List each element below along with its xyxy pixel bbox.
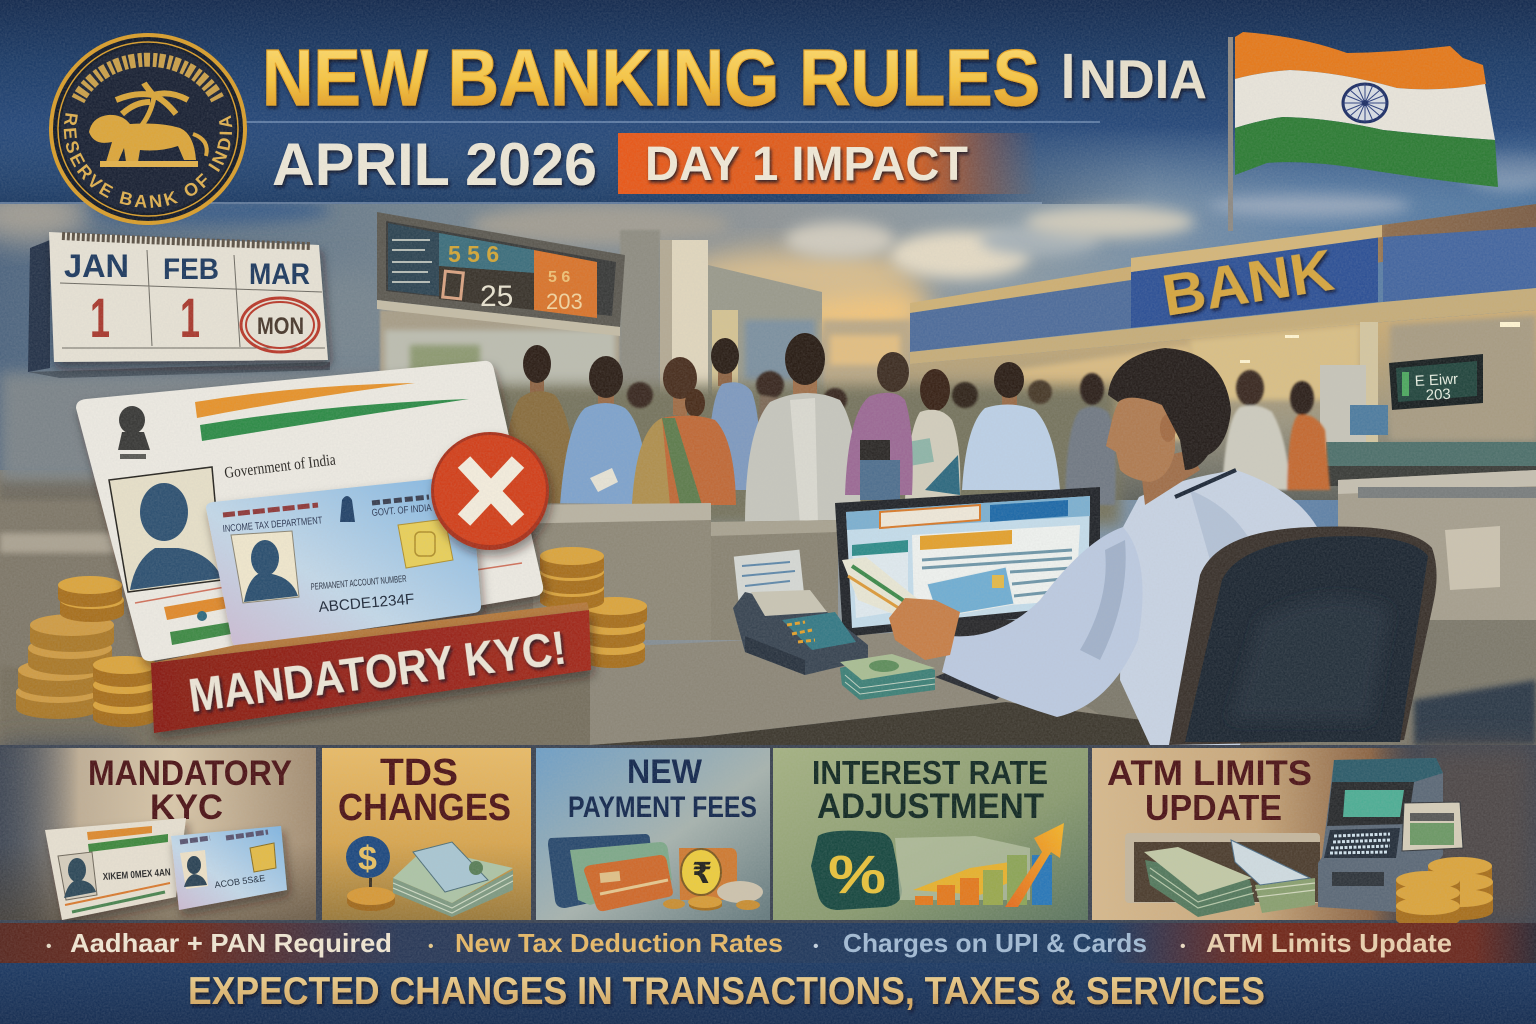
chip — [398, 519, 453, 568]
heading: KYC — [150, 788, 223, 827]
man in white blue shirt — [962, 362, 1060, 490]
coin stacks — [1396, 857, 1493, 928]
calendar dates — [90, 286, 200, 349]
calendar dates: 1 — [90, 286, 110, 349]
coins left — [16, 576, 157, 727]
growth chart — [895, 823, 1064, 907]
heading — [1107, 754, 1312, 828]
PAN card — [206, 476, 481, 647]
teller arm — [942, 527, 1143, 717]
display board: 5 5 6 — [448, 241, 499, 267]
heading: ADJUSTMENT — [817, 787, 1044, 826]
circled Monday — [241, 298, 319, 352]
Day 1 Impact banner: DAY 1 IMPACT — [645, 138, 968, 191]
card payment terminal — [733, 550, 868, 675]
bullet and item: KYC: Aadhaar + PAN Required — [70, 928, 392, 958]
red X badge — [431, 432, 549, 550]
panel: TDS changes — [322, 748, 531, 920]
desk front — [590, 702, 1180, 745]
rupee coin: ₹ — [692, 856, 712, 890]
man in white shirt — [745, 333, 861, 525]
heading: UPDATE — [1145, 787, 1282, 828]
April 2026: APRIL 2026 — [272, 131, 597, 198]
bullet and item: ATM: ATM Limits Update — [1206, 928, 1452, 958]
small kiosk — [1402, 802, 1463, 851]
KYC cards group — [16, 361, 647, 733]
percent badge: % — [828, 845, 886, 905]
small flag — [164, 596, 231, 645]
coins right — [540, 547, 647, 668]
heading: NEW — [627, 753, 703, 791]
small screen: 203 — [1425, 386, 1451, 404]
teller neck — [1140, 450, 1200, 505]
heading — [88, 754, 292, 827]
Aadhaar card: Government of India — [223, 451, 337, 482]
RBI logo: RESERVE BANK OF INDIA — [64, 113, 232, 208]
large cash stack — [1144, 840, 1315, 917]
India label: I — [1061, 40, 1075, 112]
stack of cash on desk — [840, 654, 935, 700]
bullet and item: KYC: • — [46, 938, 52, 955]
crowd of customers — [480, 333, 1330, 525]
mini PAN card — [171, 826, 287, 910]
header band — [0, 0, 1536, 204]
office chair — [1169, 526, 1437, 745]
cash tray — [1125, 833, 1320, 903]
heading: INTEREST RATE — [812, 754, 1048, 791]
PAN photo — [231, 531, 299, 603]
RBI logo — [49, 33, 247, 225]
teller shirt — [1120, 470, 1322, 745]
bottom band background — [0, 745, 1536, 925]
footer band: EXPECTED CHANGES IN TRANSACTIONS, TAXES & SERVICES — [188, 970, 1265, 1013]
woman with documents — [905, 369, 960, 500]
heading: CHANGES — [338, 787, 511, 829]
heading: MANDATORY — [88, 754, 292, 793]
calendar months: MAR — [249, 258, 310, 291]
panel: mandatory KYC — [0, 748, 316, 920]
computer monitor — [835, 487, 1100, 665]
bank sign: BANK — [1158, 238, 1338, 329]
title line one: NEW BANKING RULES — [262, 33, 1040, 122]
man in blue shirt — [560, 356, 650, 505]
mini aadhaar card — [45, 818, 186, 920]
bullet and item: tax: New Tax Deduction Rates — [455, 928, 783, 958]
PAN card: GOVT. OF INDIA — [371, 503, 432, 519]
calendar months — [64, 248, 310, 291]
PAN card: PERMANENT ACCOUNT NUMBER — [310, 574, 407, 593]
lion and palm — [89, 83, 207, 167]
rupee coin — [681, 849, 721, 895]
display board — [377, 212, 625, 336]
main title — [262, 33, 1207, 198]
heading — [568, 753, 757, 824]
man behind in blue — [708, 338, 760, 490]
ATM machine — [1318, 758, 1443, 912]
flag chakra — [1343, 84, 1387, 122]
panel: interest rate adjustment — [773, 748, 1088, 920]
bullet and item: tax: • — [428, 938, 434, 955]
panel: new payment fees — [536, 748, 770, 920]
bullet and item: ATM: • — [1180, 938, 1186, 955]
teller hair — [1108, 348, 1231, 470]
emblem — [118, 406, 150, 459]
teller hand — [889, 598, 960, 660]
heading: PAYMENT FEES — [568, 791, 757, 824]
calendar months: FEB — [163, 253, 219, 286]
PAN emblem — [340, 496, 355, 522]
India label: NDIA — [1079, 48, 1207, 110]
photo silhouette — [109, 467, 222, 592]
mini aadhaar card: XIKEM 0MEX 4AN — [102, 867, 171, 883]
bullet and item: fees: Charges on UPI & Cards — [843, 928, 1147, 958]
distant building and pillars — [380, 230, 912, 480]
heading — [338, 752, 511, 829]
circled Monday: MON — [257, 313, 304, 340]
dollar coin icon: $ — [358, 840, 377, 878]
bank teller — [842, 348, 1437, 745]
bullet and item: fees: • — [813, 938, 819, 955]
heading — [812, 754, 1048, 826]
calendar months: JAN — [64, 248, 129, 284]
small screen — [1389, 354, 1483, 410]
bank building — [910, 204, 1536, 745]
man in tan jacket — [505, 345, 578, 510]
wallet and cards — [548, 834, 763, 911]
person in purple — [845, 352, 913, 500]
PAN card: INCOME TAX DEPARTMENT — [222, 515, 323, 535]
banknote stack — [393, 842, 513, 917]
desk top — [590, 630, 1110, 745]
info strip — [0, 923, 1536, 963]
teller face — [1106, 385, 1175, 482]
Indian flag — [1228, 32, 1498, 231]
percent badge — [811, 831, 902, 910]
grey shirt man — [1080, 373, 1104, 405]
Aadhaar card — [76, 361, 543, 661]
background: sky and ground — [0, 120, 1536, 750]
calendar — [28, 232, 330, 378]
PAN card: ABCDE1234F — [318, 591, 415, 616]
teller documents — [842, 557, 925, 624]
mandatory KYC banner: MANDATORY KYC! — [185, 620, 569, 722]
small coins — [663, 881, 763, 911]
far crowd — [627, 370, 1330, 505]
mid counter and desk — [500, 503, 1180, 745]
heading: ATM LIMITS — [1107, 754, 1312, 793]
dollar coin icon — [346, 836, 395, 911]
mini PAN card: ACOB 5S&E — [214, 873, 266, 890]
display board: 25 — [480, 280, 513, 313]
heading: TDS — [380, 752, 458, 794]
display board: 5 6 — [548, 269, 570, 286]
woman in saree — [632, 357, 736, 505]
bank sign — [1131, 225, 1382, 329]
Day 1 Impact banner — [618, 133, 1038, 194]
far white shirt man — [1236, 370, 1264, 406]
footer band — [0, 963, 1536, 1024]
far woman orange — [1290, 381, 1314, 415]
panel: ATM limits update — [1092, 748, 1493, 928]
display board: 203 — [546, 289, 583, 314]
small screen: E Eiwr — [1414, 371, 1458, 390]
calendar dates: 1 — [180, 286, 200, 349]
